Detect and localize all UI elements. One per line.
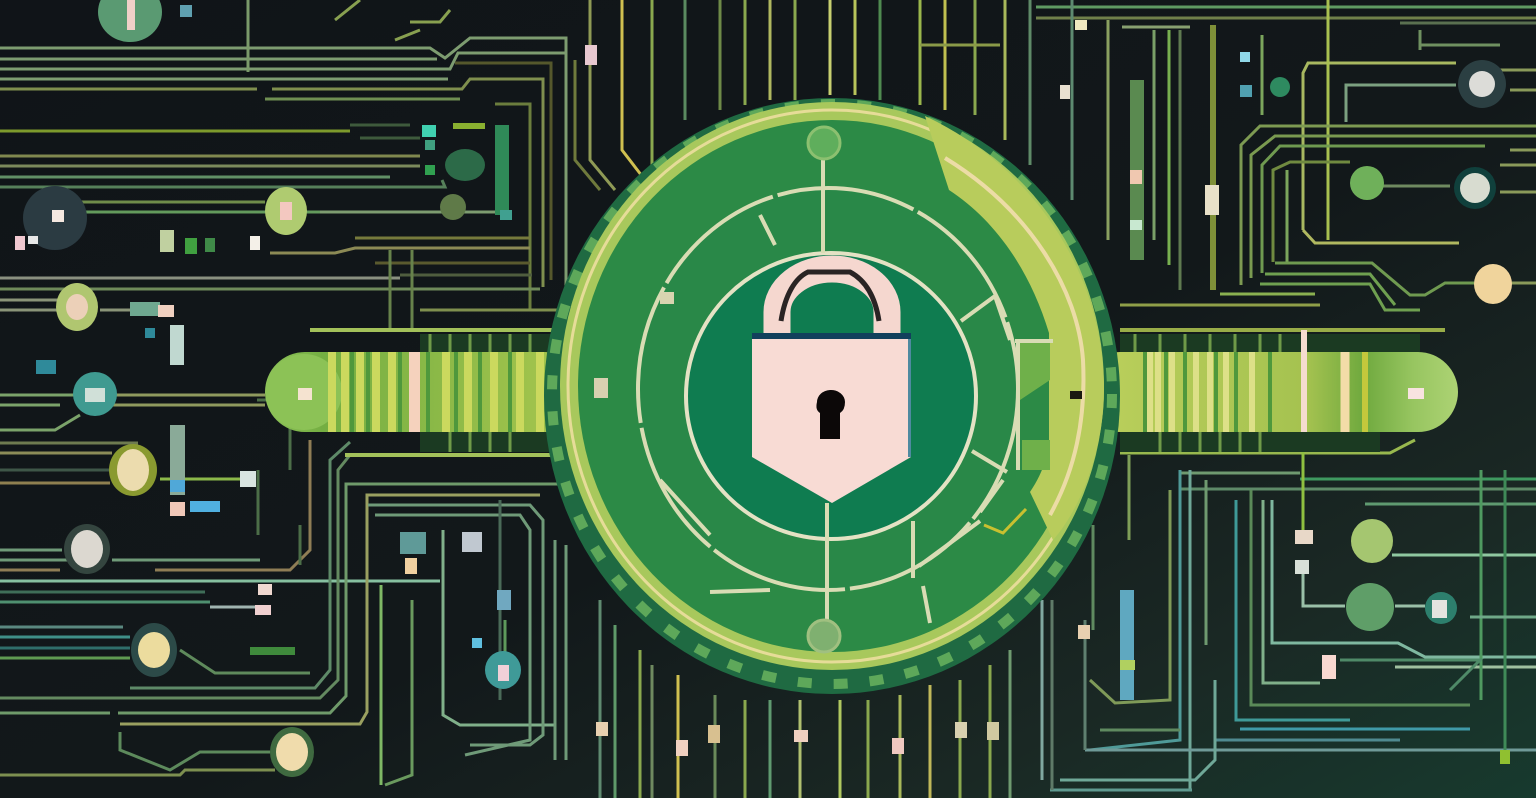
middle ring [638,188,1018,590]
top node [808,127,840,159]
left connector bar [265,352,585,432]
shackle shadow [781,272,879,321]
shackle [777,269,887,338]
yellow crescent [925,116,1104,540]
keyhole [816,390,845,439]
circuit traces: upper right [1036,0,1536,330]
yellow arc [984,509,1026,533]
bar end marker [298,388,312,400]
inner ring [686,253,976,539]
left nodes [23,0,521,777]
bottom node [808,620,840,652]
lock body [752,337,911,503]
bar highlight stripe [409,352,420,432]
right nodes [1270,60,1512,631]
dial rim [560,102,1104,670]
side dots [594,378,608,398]
connector rails [310,330,565,455]
dial spokes [660,155,1053,625]
right connector bar [1080,330,1458,432]
bar shadow stubs [420,334,1420,452]
bar end marker [1408,388,1424,399]
central dial [544,98,1120,694]
circuit traces: lower right [1042,330,1536,790]
circuit traces: top and bottom centre [600,0,1030,798]
dial halo [544,98,1120,694]
padlock [752,269,911,503]
circuit traces: lower left [0,395,566,785]
bar highlight stripe [1301,330,1307,432]
circuit traces: upper left [0,0,645,330]
inner glow blocks [1020,342,1050,470]
